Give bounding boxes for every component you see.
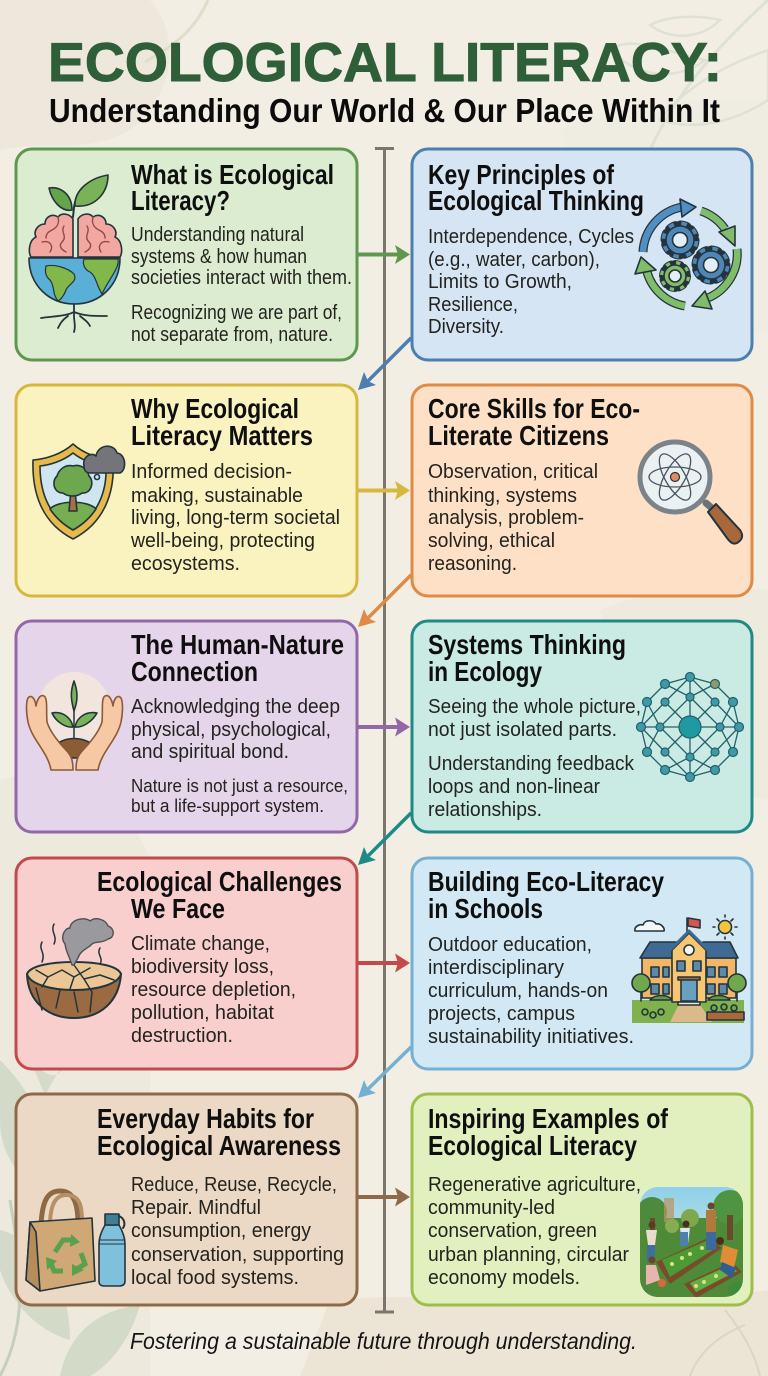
body text: Recognizing we are part of, [131,302,342,324]
heading [428,629,626,687]
body text: systems & how human [131,246,307,268]
heading [428,1103,669,1161]
body text: projects, campus [428,1003,575,1025]
heading: Core Skills for Eco- [428,393,640,424]
heading: Literacy Matters [131,420,313,451]
icon: cracked earth bowl with smoke [27,919,121,1018]
body text: Reduce, Reuse, Recycle, [131,1174,337,1196]
heading: Ecological Thinking [428,185,644,216]
icon: shopping bag and water bottle [26,1191,125,1291]
heading: Why Ecological [131,393,299,424]
body text [428,226,634,338]
heading [428,159,644,216]
panel box [412,149,752,360]
body text: destruction. [131,1025,233,1047]
body text [428,1174,641,1289]
body text: but a life-support system. [131,795,324,816]
heading: Ecological Awareness [97,1130,341,1161]
heading [97,1103,341,1161]
arrow: panel 5 to panel 6 [358,718,410,736]
body text: Seeing the whole picture, [428,696,641,718]
body text [130,461,340,575]
body text: Informed decision- [131,461,292,483]
panel box [412,858,752,1069]
heading [131,159,334,216]
body text: interdisciplinary [428,957,564,979]
body text: not just isolated parts. [428,719,617,741]
body text: sustainability initiatives. [428,1026,634,1048]
body text: local food systems. [131,1267,299,1289]
panel box [16,621,357,832]
body text: loops and non-linear [428,776,600,798]
body text: resource depletion, [131,979,296,1001]
body text: economy models. [428,1267,580,1289]
body text: analysis, problem- [428,507,584,529]
arrow: panel 7 to panel 8 [358,954,410,972]
heading [428,866,665,924]
heading: Literacy? [131,185,230,216]
arrow: panel 2 to panel 3 [358,338,411,390]
subtitle: Understanding Our World & Our Place Within It [49,92,720,129]
heading: Ecological Literacy [428,1130,638,1161]
panel: Key Principles of Ecological Thinking [412,149,752,360]
heading: in Ecology [428,656,543,687]
body text: Interdependence, Cycles [428,226,634,248]
body text: not separate from, nature. [131,324,333,346]
body text: Repair. Mindful [131,1197,261,1219]
body text: Observation, critical [428,461,598,483]
icon: magnifier with atom [640,442,742,544]
body text: Nature is not just a resource, [131,775,348,796]
body text: Diversity. [428,316,504,338]
heading: Inspiring Examples of [428,1103,669,1134]
panel box [16,385,357,596]
panel: What is Ecological Literacy? [16,149,357,360]
body text: physical, psychological, [131,719,331,741]
icon: community garden scene [637,1187,747,1301]
panel: The Human-Nature Connection [16,621,357,832]
heading: Everyday Habits for [97,1103,314,1134]
arrow: panel 6 to panel 7 [358,813,411,865]
body text: curriculum, hands-on [428,980,608,1002]
body text: Climate change, [131,933,270,955]
heading [428,393,640,451]
body text: Acknowledging the deep [131,696,340,718]
body text: consumption, energy [131,1220,311,1242]
body text: Limits to Growth, [428,271,572,293]
body text: Outdoor education, [428,934,592,956]
heading [131,629,344,687]
heading: Ecological Challenges [97,866,342,897]
panel: Everyday Habits for Ecological Awareness [16,1094,357,1305]
body text [428,934,634,1048]
body text: well-being, protecting [130,530,315,552]
panel: Building Eco-Literacy in Schools [412,858,752,1069]
body text [131,933,296,1047]
body text: relationships. [428,799,542,821]
icon: school building with garden [632,915,746,1023]
body text: (e.g., water, carbon), [428,249,600,271]
body text [131,696,348,816]
body text [131,1174,344,1289]
arrow: panel 1 to panel 2 [358,245,410,264]
body text [428,461,598,575]
heading: Systems Thinking [428,629,626,660]
icon: shield with tree and cloud [33,444,125,539]
panel: Why Ecological Literacy Matters [16,385,357,596]
body text: pollution, habitat [131,1002,274,1024]
body text: Resilience, [428,294,518,316]
body text: living, long-term societal [131,507,340,529]
heading: Literate Citizens [428,420,609,451]
heading: What is Ecological [131,159,334,190]
arrow: panel 8 to panel 9 [358,1047,411,1098]
body text: making, sustainable [131,485,303,507]
icon: brain, globe and sprout [29,175,122,332]
icon: hands holding sprout [26,672,122,770]
heading: in Schools [428,893,543,924]
body text: Understanding natural [131,224,304,246]
heading: Connection [131,656,258,687]
body text: biodiversity loss, [131,956,274,978]
icon: network of nodes [636,672,744,782]
panel box [412,385,752,596]
body text: urban planning, circular [428,1244,629,1266]
panel box [16,1094,357,1305]
heading: The Human-Nature [131,629,344,660]
body text: ecosystems. [131,553,240,575]
heading [97,866,342,924]
body text: Understanding feedback [428,753,635,775]
title: ECOLOGICAL LITERACY: [48,31,722,93]
heading: Key Principles of [428,159,615,190]
panel: Systems Thinking in Ecology [412,621,752,832]
central vertical timeline [375,148,394,1312]
body text [428,696,641,821]
heading: We Face [131,893,225,924]
body text: societies interact with them. [131,267,352,289]
body text: conservation, green [428,1220,597,1242]
panel box [16,858,357,1069]
panel: Inspiring Examples of Ecological Literacy [412,1094,752,1305]
body text: and spiritual bond. [131,741,289,763]
panel: Core Skills for Eco-Literate Citizens [412,385,752,596]
arrow: panel 3 to panel 4 [358,481,410,500]
icon: cycle arrows and gears [635,199,737,309]
body text: solving, ethical [428,530,555,552]
arrow: panel 4 to panel 5 [358,575,411,627]
panel: Ecological Challenges We Face [16,858,357,1069]
body text: community-led [428,1197,555,1219]
panel box [412,621,752,832]
heading [131,393,313,451]
heading: Building Eco-Literacy [428,866,665,897]
body text [131,224,352,346]
panel box [412,1094,752,1305]
body text: thinking, systems [428,485,577,507]
arrow: panel 9 to panel 10 [358,1188,410,1206]
footer tagline: Fostering a sustainable future through understanding. [130,1328,637,1354]
panel box [16,149,357,360]
body text: Regenerative agriculture, [428,1174,641,1196]
body text: reasoning. [428,553,517,575]
body text: conservation, supporting [131,1244,344,1266]
